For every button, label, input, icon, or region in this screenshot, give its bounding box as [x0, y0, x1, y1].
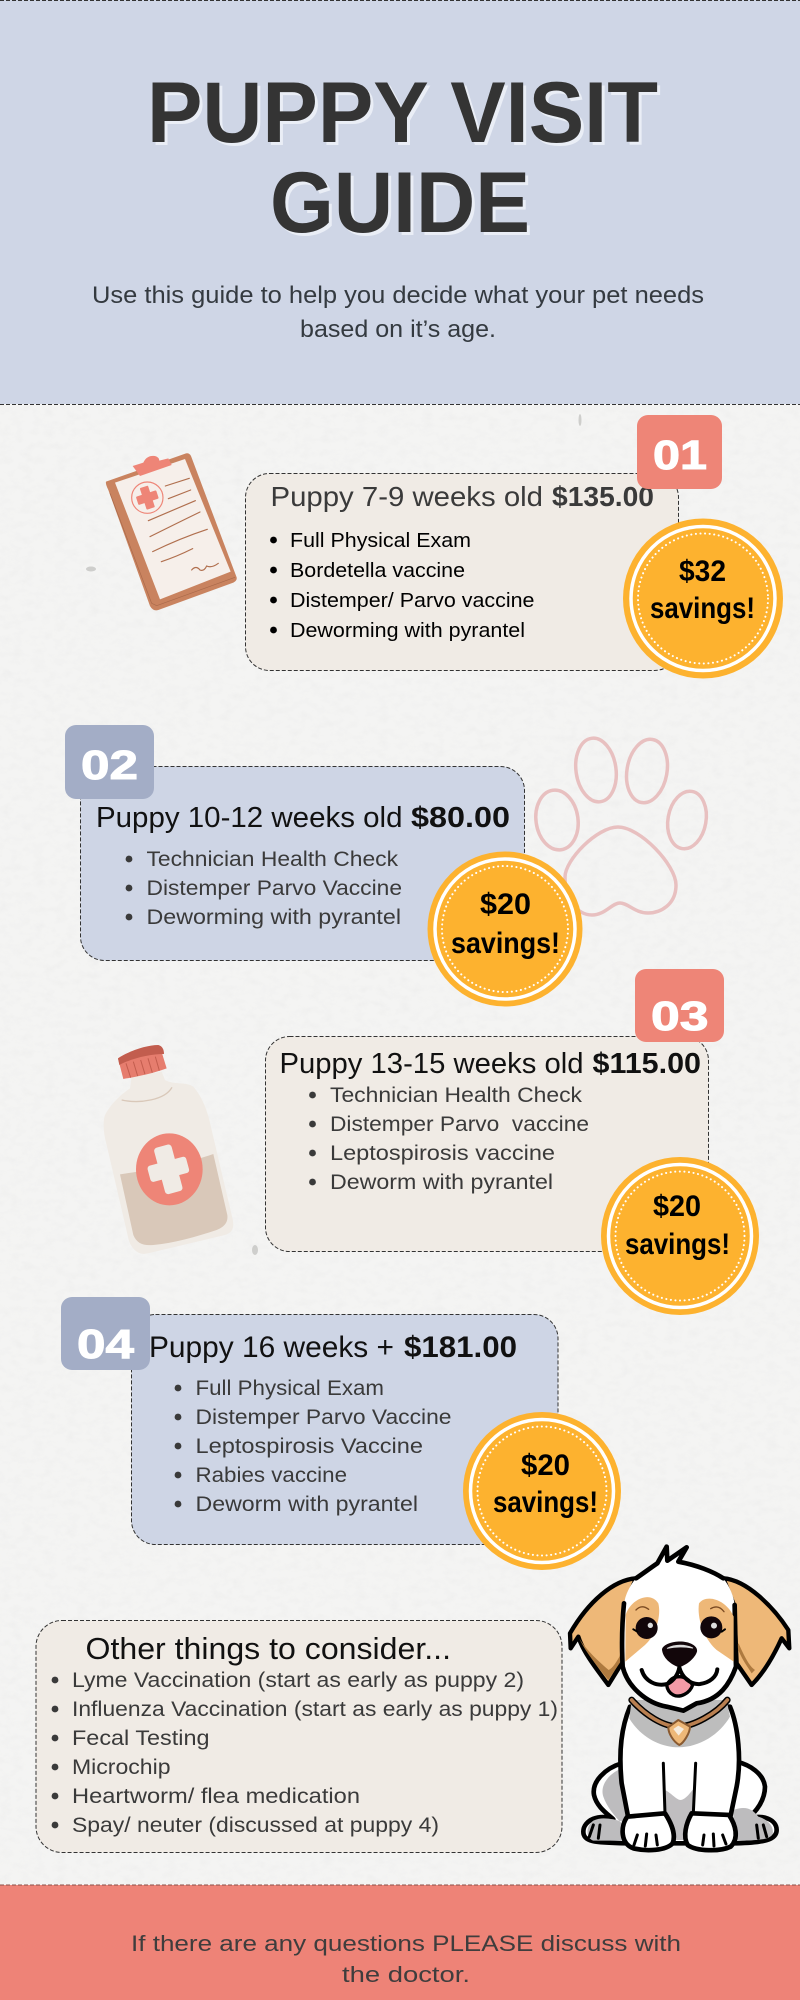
list: Full Physical Exam	[290, 530, 471, 552]
card title: $115.00	[592, 1048, 701, 1080]
icon: clipboard	[106, 453, 237, 610]
list	[270, 530, 534, 642]
number badge 02: 02	[81, 742, 138, 788]
list: Heartworm/ flea medication	[72, 1785, 360, 1808]
savings badge $20 (puppy 3): $20	[653, 1190, 701, 1223]
savings badge $20 (puppy 2): $20	[480, 888, 531, 921]
title	[147, 65, 658, 251]
list: Influenza Vaccination (start as early as puppy 1)	[72, 1698, 558, 1721]
ears	[570, 1578, 636, 1685]
list: Fecal Testing	[72, 1727, 210, 1750]
eyes	[636, 1617, 658, 1639]
list: Lyme Vaccination (start as early as puppy 2)	[72, 1669, 524, 1692]
number badge 03: 03	[651, 993, 708, 1039]
card title: Other things to consider...	[86, 1632, 451, 1666]
list: Technician Health Check	[330, 1084, 583, 1107]
list: Bordetella vaccine	[290, 560, 465, 582]
panel: header	[0, 0, 800, 404]
savings badge $20 (puppy 3): savings!	[625, 1228, 730, 1261]
list: Technician Health Check	[146, 848, 399, 871]
number badge 01: 01	[653, 432, 707, 478]
footer text: the doctor.	[342, 1962, 470, 1987]
list	[52, 1669, 558, 1837]
list: Full Physical Exam	[196, 1377, 384, 1400]
list: Spay/ neuter (discussed at puppy 4)	[72, 1814, 439, 1837]
subtitle: Use this guide to help you decide what your pet needs	[92, 282, 704, 309]
number badge 01	[637, 415, 722, 489]
card title: Puppy 7-9 weeks old	[270, 481, 543, 512]
panel: other things to consider	[36, 1620, 562, 1852]
list: Deworming with pyrantel	[146, 906, 401, 929]
card title: Puppy 16 weeks +	[149, 1331, 394, 1364]
list: Deworm with pyrantel	[330, 1171, 553, 1194]
list: Distemper/ Parvo vaccine	[290, 590, 534, 612]
card title: $135.00	[552, 481, 654, 512]
icon: medicine bottle	[104, 1045, 233, 1254]
list	[175, 1377, 452, 1516]
panel: puppy 10-12 weeks	[80, 766, 524, 960]
savings badge $20 (puppy 4)	[463, 1412, 621, 1570]
list	[309, 1084, 589, 1194]
subtitle	[92, 282, 704, 343]
list: Distemper Parvo Vaccine	[146, 877, 402, 900]
nose	[662, 1641, 697, 1667]
card title: $80.00	[411, 802, 510, 834]
haunches	[583, 1762, 777, 1843]
number badge 04	[61, 1297, 150, 1370]
list: Distemper Parvo Vaccine	[196, 1406, 452, 1429]
number badge 02	[65, 725, 154, 799]
savings badge $20 (puppy 4): $20	[521, 1449, 570, 1482]
savings badge $20 (puppy 2)	[428, 852, 582, 1006]
list: Leptospirosis Vaccine	[196, 1435, 423, 1458]
head	[622, 1547, 736, 1711]
number badge 03	[635, 969, 724, 1042]
card title: Puppy 13-15 weeks old	[280, 1048, 584, 1080]
front paws	[623, 1813, 674, 1850]
title: GUIDE	[270, 155, 530, 251]
subtitle: based on it’s age.	[300, 316, 496, 343]
list	[126, 848, 402, 929]
savings badge $20 (puppy 4): savings!	[493, 1486, 598, 1519]
savings badge $32: savings!	[650, 592, 755, 625]
panel: puppy 16 weeks plus	[132, 1314, 558, 1544]
savings badge $32	[623, 518, 783, 678]
collar	[632, 1700, 727, 1727]
title: PUPPY VISIT	[147, 65, 658, 161]
card title: Puppy 10-12 weeks old	[96, 802, 403, 834]
torso	[620, 1707, 739, 1827]
card title	[270, 481, 654, 512]
mouth	[642, 1667, 717, 1685]
tongue	[667, 1677, 693, 1696]
savings badge $20 (puppy 2): savings!	[451, 927, 560, 960]
icon: paw outline	[532, 736, 711, 915]
savings badge $32: $32	[679, 555, 726, 588]
list: Deworm with pyrantel	[196, 1493, 418, 1516]
list: Leptospirosis vaccine	[330, 1142, 555, 1165]
footer text	[131, 1931, 681, 1987]
list: Rabies vaccine	[196, 1464, 347, 1487]
icon: cartoon puppy	[570, 1547, 789, 1850]
panel: puppy 7-9 weeks	[246, 474, 678, 670]
list: Microchip	[72, 1756, 170, 1779]
card title: $181.00	[404, 1331, 517, 1364]
list: Distemper Parvo vaccine	[330, 1113, 589, 1136]
footer text: If there are any questions PLEASE discuss with	[131, 1931, 681, 1956]
number badge 04: 04	[77, 1321, 134, 1367]
list: Deworming with pyrantel	[290, 620, 525, 642]
panel: puppy 13-15 weeks	[266, 1036, 708, 1252]
savings badge $20 (puppy 3)	[601, 1157, 759, 1315]
card title	[149, 1331, 517, 1364]
panel: footer	[0, 1885, 800, 2000]
